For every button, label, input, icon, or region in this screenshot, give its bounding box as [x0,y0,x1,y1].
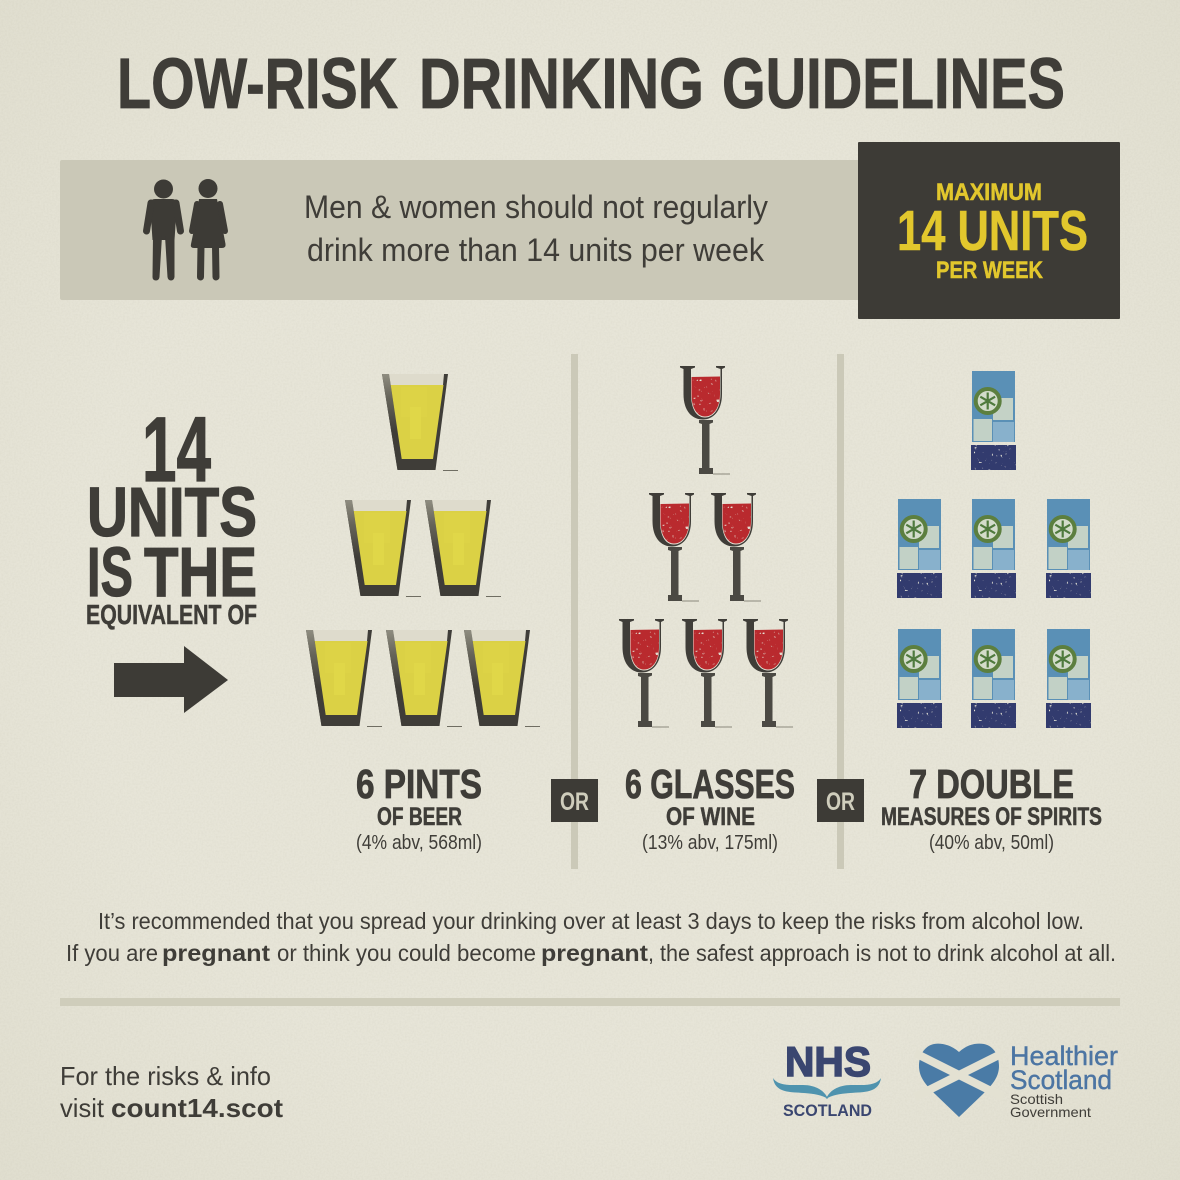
logo text: Healthier Scotland, Scottish Government: Healthier [1010,1041,1118,1071]
equivalent heading: 14 [142,399,211,501]
title: GUIDELINES [722,45,1065,124]
website call to action: count14.scot [111,1093,283,1123]
logo text: Healthier Scotland, Scottish Government: Scotland [1010,1065,1112,1095]
spirits caption [881,761,1102,854]
arrow [114,646,228,713]
banner text: Men & women should not regularly [304,189,768,225]
advice text: , the safest approach is not to drink alcohol at all. [648,940,1116,966]
beer caption [356,761,482,854]
banner text: drink more than 14 units per week [307,232,765,268]
equivalent heading: EQUIVALENT OF [86,599,257,630]
maximum units text [897,179,1088,284]
panel: maximum units box [858,142,1120,319]
equivalent heading [86,399,257,630]
wine caption: OF WINE [666,803,755,831]
or badge [817,779,864,822]
equivalent heading: UNITS [87,473,257,551]
spirits caption: (40% abv, 50ml) [929,832,1054,854]
or badge: OR [826,788,855,816]
advice text: It’s recommended that you spread your drinking over at least 3 days to keep the risks from alcohol low. [98,908,1084,934]
logo: Healthier Scotland heart [915,1044,1003,1117]
logo text: Healthier Scotland, Scottish Government: Government [1010,1104,1091,1120]
rule [60,998,1120,1006]
banner text [304,189,768,268]
maximum units text: PER WEEK [936,257,1044,284]
beer caption: (4% abv, 568ml) [356,832,482,854]
logo text: Healthier Scotland, Scottish Government [1010,1041,1118,1120]
maximum units text: MAXIMUM [936,179,1042,206]
logo text: Healthier Scotland, Scottish Government: Scottish [1010,1091,1063,1107]
spirits caption: 7 DOUBLE [909,761,1074,807]
divider [837,354,844,869]
beer caption: 6 PINTS [356,761,482,807]
panel: weekly guidance banner [60,160,860,300]
wine caption: 6 GLASSES [625,761,795,807]
advice text: pregnant [541,940,648,966]
logo: NHS Scotland: NHS [785,1038,871,1085]
divider [571,354,578,869]
logo: NHS Scotland [773,1038,881,1120]
or badge: OR [560,788,589,816]
wine glasses [619,366,793,727]
website call to action: For the risks & info [60,1061,271,1091]
spirit measures [897,371,1091,728]
equivalent heading: IS [87,533,133,611]
wine caption: (13% abv, 175ml) [642,832,778,854]
advice text: or think you could become [277,940,536,966]
advice text [66,908,1116,966]
advice text: pregnant [162,940,270,966]
logo: NHS Scotland: SCOTLAND [783,1101,872,1120]
title: LOW-RISK [117,45,398,124]
icon: man and woman [146,179,226,280]
title [117,45,1065,124]
wine caption [625,761,795,854]
website call to action: visit [60,1093,105,1123]
title: DRINKING [419,45,704,124]
maximum units text: 14 UNITS [897,199,1088,263]
advice text: If you are [66,940,158,966]
or badge [551,779,598,822]
spirits caption: MEASURES OF SPIRITS [881,803,1102,831]
beer glasses [306,374,540,726]
beer caption: OF BEER [377,803,462,831]
equivalent heading: THE [144,533,257,611]
website call to action [60,1061,283,1123]
